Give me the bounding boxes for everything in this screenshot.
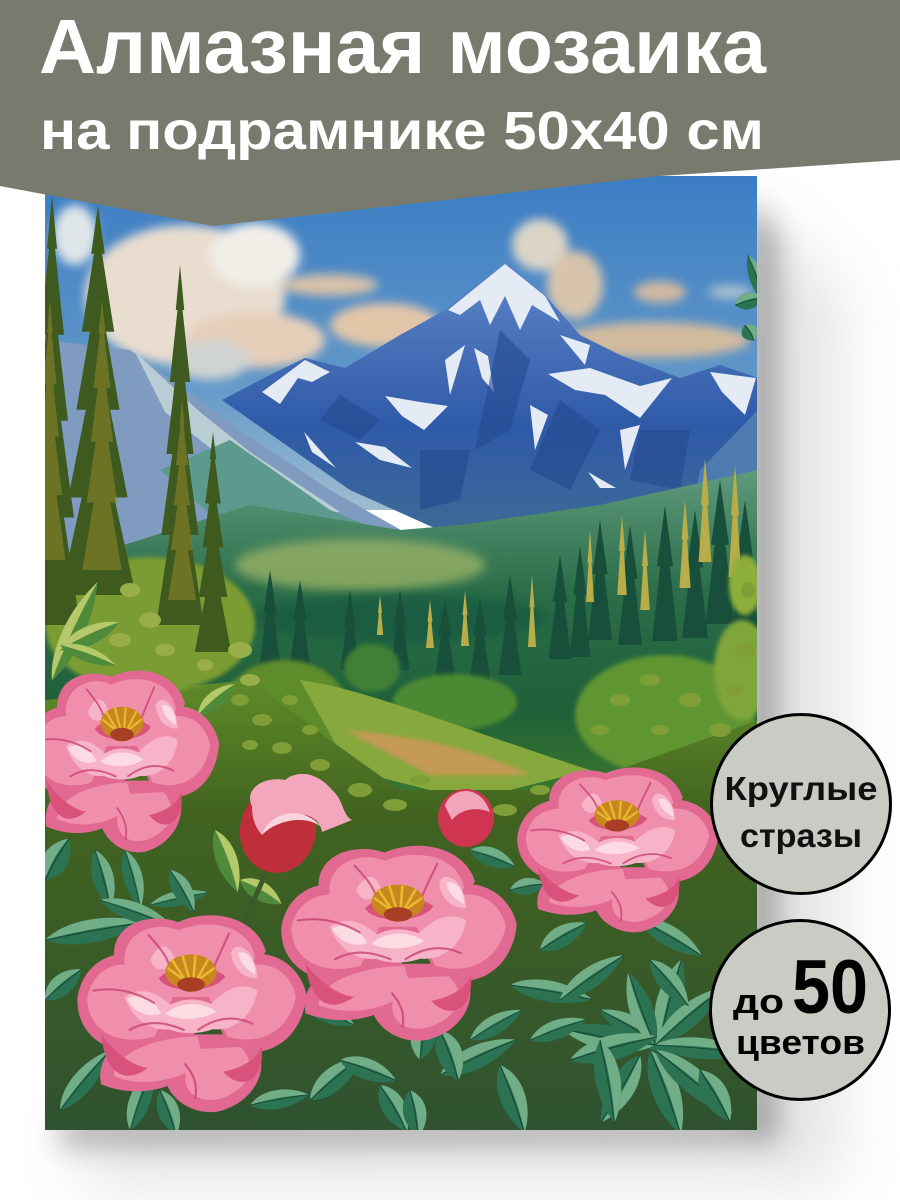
subtitle: на подрамнике 50х40 см <box>40 101 764 161</box>
valley forest <box>45 470 758 810</box>
left tall trees <box>45 557 255 693</box>
snow <box>262 264 756 488</box>
canvas drop shadow <box>60 195 840 1185</box>
badge: round rhinestones: Круглые <box>724 770 878 807</box>
meadow <box>300 680 590 800</box>
distant left mountain <box>45 340 410 570</box>
lower ground <box>45 680 758 1130</box>
peony buds <box>240 774 494 900</box>
foliage leaves <box>33 826 752 1139</box>
badge: round rhinestones <box>712 714 890 894</box>
badge: up to 50 colours: 50 <box>792 945 868 1030</box>
bushes behind meadow <box>220 555 770 775</box>
right branch <box>734 254 757 341</box>
sky <box>45 170 758 510</box>
badge: up to 50 colours: до <box>733 983 784 1021</box>
title: Алмазная мозаика <box>39 4 767 90</box>
clouds <box>53 205 752 380</box>
painting: mountain landscape with peonies <box>24 170 774 1139</box>
dappled yellow-green foliage <box>231 582 755 816</box>
main mountains <box>222 262 758 535</box>
header banner <box>0 0 900 226</box>
badge: round rhinestones: стразы <box>740 817 862 854</box>
peony flowers <box>27 671 219 852</box>
badge: up to 50 colours: цветов <box>736 1024 865 1062</box>
far conifers <box>260 480 758 680</box>
badge: up to 50 colours <box>710 920 890 1100</box>
